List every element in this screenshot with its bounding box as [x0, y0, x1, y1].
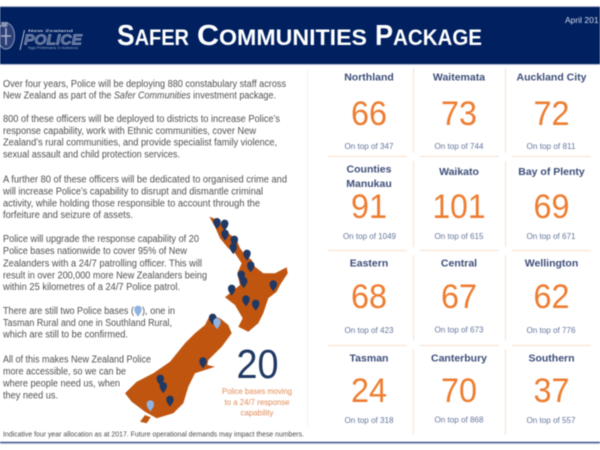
callout: 20 police bases: capability [240, 408, 274, 418]
card: Tasman: Tasman [350, 352, 388, 364]
paragraph: district deployment: sexual assault and child protection services. [3, 150, 180, 160]
card: Waikato: Waikato [439, 166, 479, 178]
paragraph: closing: All of this makes New Zealand Police [3, 354, 151, 366]
card: Counties Manukau [343, 164, 396, 241]
card: Northland: 66 [351, 95, 387, 133]
intro text [3, 79, 286, 102]
paragraph: closing: where people need us, when [2, 378, 120, 390]
paragraph: response capability: result in over 200,000 more New Zealanders being [3, 270, 207, 282]
paragraph: response capability: Zealanders with a 24/7 patrolling officer. This will [3, 258, 202, 270]
card: Bay of Plenty [518, 166, 585, 241]
card: Counties Manukau: 91 [351, 188, 387, 226]
card: Northland: On top of 347 [344, 141, 394, 151]
card: Northland [344, 72, 394, 151]
header banner [0, 6, 600, 65]
card: Auckland City: 72 [534, 95, 570, 133]
paragraph: organised crime: forfeiture and seizure of assets. [3, 210, 133, 221]
title [117, 20, 482, 52]
card: Tasman [344, 352, 394, 425]
callout: 20 police bases [222, 341, 292, 418]
card: Auckland City: Auckland City [516, 72, 587, 84]
paragraph: response capability: Police bases nationwide to cover 95% of New [3, 246, 188, 257]
card: Eastern: On top of 423 [344, 325, 394, 335]
title: COMMUNITIES [197, 20, 367, 52]
card: Waikato [432, 166, 486, 241]
paragraph: closing: they need us. [3, 390, 58, 402]
paragraph: response capability: Police will upgrade the response capability of 20 [3, 234, 199, 245]
card: Central [434, 258, 484, 334]
card: Southern [526, 352, 576, 425]
card: Waikato: On top of 615 [434, 231, 484, 241]
card: Central: Central [441, 258, 477, 270]
police logo: POLICE [24, 32, 83, 48]
card: Bay of Plenty: 69 [534, 188, 570, 226]
card: Central: 67 [441, 278, 477, 316]
light pins: bases to be confirmed [147, 318, 221, 412]
callout: 20 police bases: Police bases moving [222, 386, 292, 396]
north island [209, 217, 288, 332]
title: SAFER [117, 20, 189, 52]
card: Auckland City [516, 72, 587, 151]
police logo [0, 22, 83, 50]
paragraph: bases to be confirmed: which are still to be confirmed. [2, 330, 128, 340]
card: Waitemata: On top of 744 [434, 141, 484, 151]
paragraph: organised crime [2, 174, 287, 221]
card: Eastern [344, 258, 394, 335]
card: Central: On top of 673 [434, 324, 484, 334]
callout: 20 police bases: 20 [236, 341, 278, 387]
card: Southern: 37 [534, 372, 570, 410]
card: Waikato: 101 [432, 188, 486, 226]
paragraph: organised crime: activity, while holding those responsible to account through the [3, 198, 260, 210]
card: Canterbury [431, 352, 487, 424]
paragraph: bases to be confirmed: ), one in [142, 306, 175, 317]
card: Wellington [525, 258, 578, 335]
card: Wellington: 62 [534, 278, 570, 316]
police logo: Nga Pirihimana O Aotearoa [28, 46, 78, 50]
map of New Zealand with police base pins [125, 217, 288, 423]
paragraph: organised crime: will increase Police’s capability to disrupt and dismantle criminal [2, 186, 263, 198]
card: Bay of Plenty: Bay of Plenty [518, 166, 585, 178]
south island [125, 315, 232, 418]
card: Tasman: On top of 318 [344, 415, 394, 425]
card: Tasman: 24 [351, 372, 387, 410]
card: Waitemata: 73 [441, 95, 477, 133]
icon: light blue pin legend [134, 306, 142, 317]
card: Northland: Northland [344, 72, 394, 84]
paragraph: response capability: within 25 kilometres of a 24/7 Police patrol. [2, 282, 180, 293]
paragraph: bases to be confirmed: There are still two Police bases ( [3, 306, 135, 317]
card: Counties Manukau: Counties [347, 164, 392, 176]
card: Eastern: 68 [351, 278, 387, 316]
intro text: New Zealand as part of the Safer Communities investment package. [3, 90, 276, 102]
card: Southern: Southern [528, 352, 575, 364]
dark pins: confirmed bases [157, 218, 277, 407]
paragraph: district deployment [3, 114, 280, 160]
card: Counties Manukau: On top of 1049 [343, 231, 396, 241]
card: Waitemata [433, 72, 485, 151]
card: Eastern: Eastern [350, 258, 388, 270]
paragraph: bases to be confirmed [2, 306, 175, 340]
card: Canterbury: On top of 868 [434, 414, 484, 424]
paragraph: district deployment: Zealand’s rural communities, and provide specialist family violence, [3, 138, 277, 148]
police logo: New Zealand [28, 28, 74, 33]
card: Canterbury: 70 [441, 372, 477, 410]
date: April 201 [565, 15, 599, 25]
card: Auckland City: On top of 811 [526, 141, 576, 151]
title: PACKAGE [375, 20, 482, 52]
intro text: Over four years, Police will be deploying 880 constabulary staff across [3, 79, 286, 90]
paragraph: bases to be confirmed: Tasman Rural and one in Southland Rural, [3, 318, 172, 329]
card: Wellington: Wellington [525, 258, 578, 270]
paragraph: closing [2, 354, 151, 402]
card: Bay of Plenty: On top of 671 [526, 231, 576, 241]
paragraph: district deployment: 800 of these officers will be deployed to districts to increase Police’s [3, 114, 280, 125]
paragraph: district deployment: response capability, work with Ethnic communities, cover New [3, 126, 257, 137]
footnote: Indicative four year allocation as at 2017. Future operational demands may impact these numbers. [3, 430, 304, 438]
paragraph: closing: more accessible, so we can be [3, 366, 126, 378]
card: Wellington: On top of 776 [526, 325, 576, 335]
card: Counties Manukau: Manukau [346, 178, 392, 190]
card: Southern: On top of 557 [526, 415, 576, 425]
paragraph: response capability [2, 234, 207, 293]
card: Canterbury: Canterbury [431, 352, 487, 364]
stewart island [140, 415, 151, 423]
card: Waitemata: Waitemata [433, 72, 485, 84]
callout: 20 police bases: to a 24/7 response [224, 397, 290, 407]
paragraph: organised crime: A further 80 of these officers will be dedicated to organised crime and [3, 174, 287, 186]
